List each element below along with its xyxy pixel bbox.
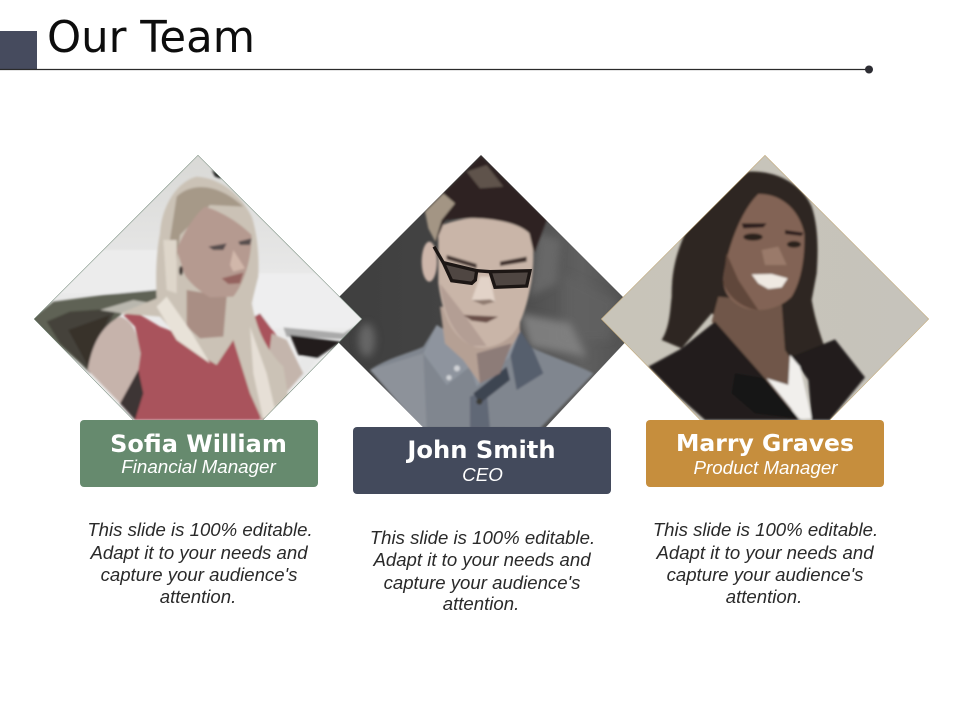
description: Sofia William: Adapt it to your needs and bbox=[89, 542, 308, 563]
description: Marry Graves: attention. bbox=[726, 586, 802, 607]
right arm bbox=[260, 333, 303, 420]
name card: John Smith bbox=[353, 427, 611, 494]
photo: John Smith bbox=[310, 150, 650, 430]
description: Marry Graves: Adapt it to your needs and bbox=[655, 542, 874, 563]
nose bbox=[472, 277, 495, 305]
header accent square bbox=[0, 31, 37, 69]
description: Marry Graves: This slide is 100% editable. bbox=[653, 519, 878, 540]
mouth bbox=[463, 315, 498, 323]
photo: Sofia William bbox=[30, 150, 367, 425]
title: Our Team bbox=[47, 13, 255, 63]
lips bbox=[222, 273, 243, 284]
earring bbox=[179, 266, 183, 275]
white shirt bbox=[767, 355, 812, 419]
name card: Sofia William bbox=[80, 420, 318, 487]
description: Marry Graves: capture your audience's bbox=[667, 564, 863, 585]
hair strands bbox=[250, 327, 277, 419]
description: Sofia William: attention. bbox=[160, 586, 236, 607]
ear bbox=[422, 242, 437, 282]
hair bbox=[427, 156, 547, 253]
header rule with end dot bbox=[0, 66, 873, 74]
name card: Sofia William: Financial Manager bbox=[121, 456, 276, 477]
dress bbox=[120, 312, 280, 420]
photo: Marry Graves bbox=[598, 150, 933, 425]
shirt buttons bbox=[454, 365, 460, 371]
description: Sofia William: capture your audience's bbox=[101, 564, 297, 585]
description: John Smith: This slide is 100% editable. bbox=[370, 527, 595, 548]
description: John Smith bbox=[370, 527, 595, 614]
description: Marry Graves bbox=[653, 519, 878, 607]
name card: Marry Graves: Product Manager bbox=[693, 457, 838, 478]
name card: Sofia William: Sofia William bbox=[110, 430, 287, 458]
arm bbox=[88, 317, 141, 403]
jacket bbox=[648, 322, 865, 420]
description: John Smith: Adapt it to your needs and bbox=[372, 549, 591, 570]
nose bbox=[230, 250, 245, 272]
window band bbox=[212, 170, 223, 178]
description: John Smith: capture your audience's bbox=[384, 572, 580, 593]
neck bbox=[712, 297, 792, 417]
hair bbox=[120, 177, 288, 419]
sofa bbox=[30, 290, 163, 373]
face bbox=[177, 207, 252, 297]
smile bbox=[752, 274, 788, 289]
brows and eyes bbox=[742, 223, 767, 228]
shirt bbox=[370, 325, 593, 428]
face bbox=[723, 194, 804, 310]
name card: Marry Graves bbox=[646, 420, 884, 487]
description: Sofia William bbox=[87, 519, 313, 607]
name card: John Smith: CEO bbox=[462, 464, 503, 485]
name card: Marry Graves: Marry Graves bbox=[676, 429, 854, 457]
neck bbox=[187, 290, 227, 338]
description: John Smith: attention. bbox=[443, 593, 519, 614]
name card: John Smith: John Smith bbox=[405, 436, 556, 464]
face bbox=[438, 216, 533, 348]
eyebrows bbox=[447, 255, 477, 268]
glasses bbox=[434, 247, 530, 287]
neck bbox=[440, 307, 520, 383]
hair bbox=[662, 172, 828, 357]
eyes bbox=[208, 243, 227, 250]
description: Sofia William: This slide is 100% editable. bbox=[87, 519, 313, 540]
